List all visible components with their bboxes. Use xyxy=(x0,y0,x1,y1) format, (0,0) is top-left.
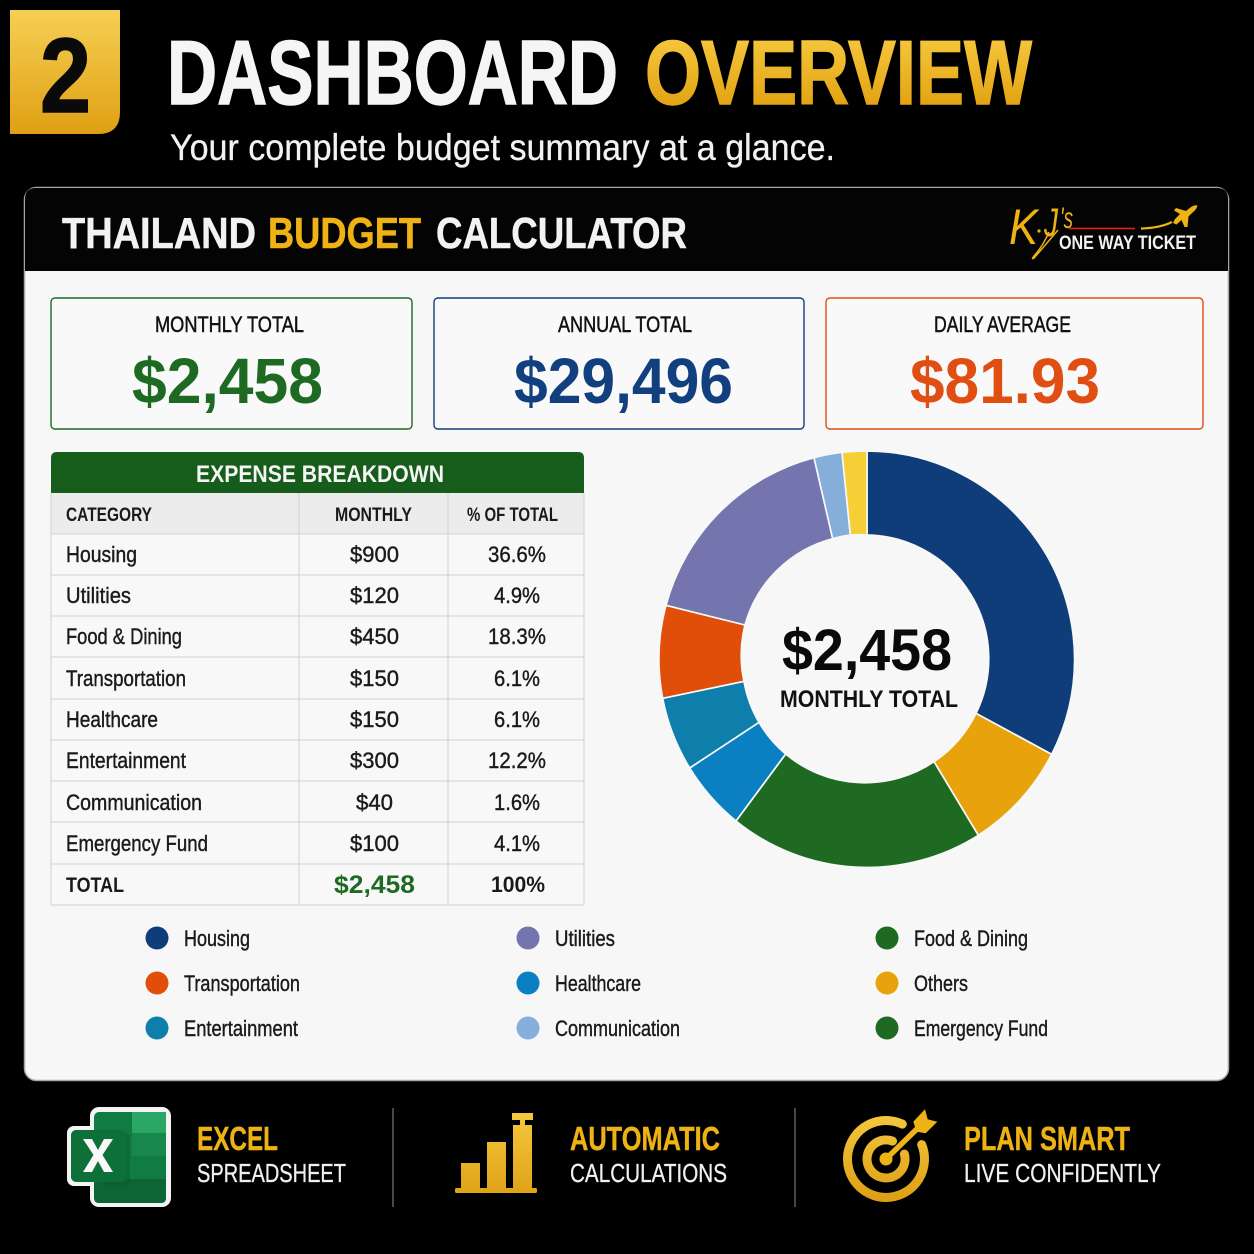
row: total: $2,458 xyxy=(334,871,415,899)
legend: transportation xyxy=(146,971,300,996)
legend: others: Others xyxy=(914,971,968,996)
row: communication xyxy=(66,790,540,815)
legend: housing xyxy=(146,926,250,951)
row: housing: 36.6% xyxy=(488,542,546,567)
legend: healthcare xyxy=(516,971,641,996)
card: monthly total: $2,458 xyxy=(132,345,323,417)
segment: food and dining xyxy=(736,754,978,867)
row: utilities: Utilities xyxy=(66,583,131,608)
legend: entertainment xyxy=(146,1016,298,1041)
row: utilities: $120 xyxy=(350,583,399,608)
panel heading xyxy=(62,209,687,258)
legend: food and dining: Food & Dining xyxy=(914,926,1028,951)
row: transportation xyxy=(66,666,540,691)
segment: emergency fund xyxy=(842,451,867,535)
table: expense breakdown xyxy=(51,452,584,905)
table title bar xyxy=(51,452,584,493)
logo: KJ's One Way Ticket: J xyxy=(1043,201,1059,245)
label: automatic calculations: AUTOMATIC xyxy=(570,1120,720,1157)
row: healthcare xyxy=(66,707,540,732)
row: total: 100% xyxy=(491,872,545,897)
icon: bar chart calculations xyxy=(455,1113,537,1193)
segment: entertainment xyxy=(663,681,759,768)
panel: budget calculator xyxy=(24,188,1228,1080)
segment: utilities xyxy=(666,458,833,625)
row: transportation: Transportation xyxy=(66,666,186,691)
row: communication: $40 xyxy=(356,790,393,815)
row: healthcare: Healthcare xyxy=(66,707,158,732)
logo: KJ's One Way Ticket xyxy=(1009,199,1198,259)
legend: transportation: Transportation xyxy=(184,971,300,996)
table column headers: CATEGORY xyxy=(66,505,152,526)
panel heading: CALCULATOR xyxy=(436,209,687,258)
donut centre total: MONTHLY TOTAL xyxy=(780,686,958,713)
row: emergency fund: $100 xyxy=(350,831,399,856)
badge: step number 2: 2 xyxy=(40,17,91,135)
row: housing: Housing xyxy=(66,542,137,567)
table title bar: EXPENSE BREAKDOWN xyxy=(196,461,444,488)
row: food and dining: Food & Dining xyxy=(66,624,182,649)
row: utilities: 4.9% xyxy=(494,583,540,608)
table column headers xyxy=(66,505,558,526)
legend: communication: Communication xyxy=(555,1016,680,1041)
panel heading: BUDGET xyxy=(268,209,421,258)
row: entertainment xyxy=(66,748,546,773)
label: plan smart live confidently: PLAN SMART xyxy=(964,1120,1130,1157)
title: DASHBOARD xyxy=(167,23,618,124)
legend: utilities xyxy=(516,926,615,951)
label: automatic calculations: CALCULATIONS xyxy=(570,1158,727,1188)
title: OVERVIEW xyxy=(645,23,1032,124)
logo: KJ's One Way Ticket: ONE WAY TICKET xyxy=(1059,233,1196,254)
row: food and dining xyxy=(66,624,546,649)
row: entertainment: Entertainment xyxy=(66,748,186,773)
segment: others xyxy=(934,713,1052,835)
subtitle: Your complete budget summary at a glance. xyxy=(170,127,835,168)
row: healthcare: 6.1% xyxy=(494,707,540,732)
panel header bar xyxy=(25,188,1228,271)
row: food and dining: $450 xyxy=(350,624,399,649)
row: transportation: $150 xyxy=(350,666,399,691)
legend: emergency fund xyxy=(876,1016,1048,1041)
row: emergency fund: Emergency Fund xyxy=(66,831,208,856)
card: daily average xyxy=(826,298,1203,429)
row: communication: Communication xyxy=(66,790,202,815)
legend: emergency fund: Emergency Fund xyxy=(914,1016,1048,1041)
row: entertainment: 12.2% xyxy=(488,748,546,773)
row: emergency fund xyxy=(66,831,540,856)
table column headers: MONTHLY xyxy=(335,505,412,526)
card: daily average: DAILY AVERAGE xyxy=(934,312,1071,337)
segment: healthcare xyxy=(690,722,786,821)
legend: utilities: Utilities xyxy=(555,926,615,951)
badge: step number 2 xyxy=(10,10,120,135)
panel heading: THAILAND xyxy=(62,209,256,258)
table column headers: % OF TOTAL xyxy=(467,505,558,526)
segment: transportation xyxy=(659,605,745,698)
donut chart xyxy=(659,451,1075,867)
row: housing xyxy=(66,542,546,567)
title xyxy=(167,23,1032,124)
row: total: TOTAL xyxy=(66,874,124,897)
legend: housing: Housing xyxy=(184,926,250,951)
segment: housing xyxy=(867,451,1075,754)
card: daily average: $81.93 xyxy=(910,345,1100,417)
card: monthly total xyxy=(51,298,412,429)
card: annual total: $29,496 xyxy=(514,345,733,417)
row: food and dining: 18.3% xyxy=(488,624,546,649)
label: excel spreadsheet: SPREADSHEET xyxy=(197,1158,346,1188)
card: annual total: ANNUAL TOTAL xyxy=(558,312,692,337)
label: plan smart live confidently: LIVE CONFIDENTLY xyxy=(964,1158,1161,1188)
segment: communication xyxy=(814,452,850,539)
logo: KJ's One Way Ticket: 's xyxy=(1060,202,1073,235)
row: emergency fund: 4.1% xyxy=(494,831,540,856)
row: transportation: 6.1% xyxy=(494,666,540,691)
row: total xyxy=(66,871,545,899)
logo: KJ's One Way Ticket: K xyxy=(1009,199,1040,255)
icon: target with arrow xyxy=(847,1109,937,1197)
donut centre total: $2,458 xyxy=(782,618,952,683)
legend: others xyxy=(876,971,968,996)
row: utilities xyxy=(66,583,540,608)
card: monthly total: MONTHLY TOTAL xyxy=(155,312,304,337)
legend: entertainment: Entertainment xyxy=(184,1016,298,1041)
legend: food and dining xyxy=(876,926,1028,951)
row: healthcare: $150 xyxy=(350,707,399,732)
label: excel spreadsheet: EXCEL xyxy=(197,1120,278,1157)
label: automatic calculations xyxy=(570,1120,727,1188)
label: excel spreadsheet xyxy=(197,1120,346,1188)
donut centre total xyxy=(780,618,958,713)
legend xyxy=(146,926,1048,1041)
row: entertainment: $300 xyxy=(350,748,399,773)
icon: excel spreadsheet xyxy=(67,1107,171,1207)
row: housing: $900 xyxy=(350,542,399,567)
label: plan smart live confidently xyxy=(964,1120,1161,1188)
row: communication: 1.6% xyxy=(494,790,540,815)
legend: communication xyxy=(516,1016,680,1041)
card: annual total xyxy=(434,298,804,429)
legend: healthcare: Healthcare xyxy=(555,971,641,996)
